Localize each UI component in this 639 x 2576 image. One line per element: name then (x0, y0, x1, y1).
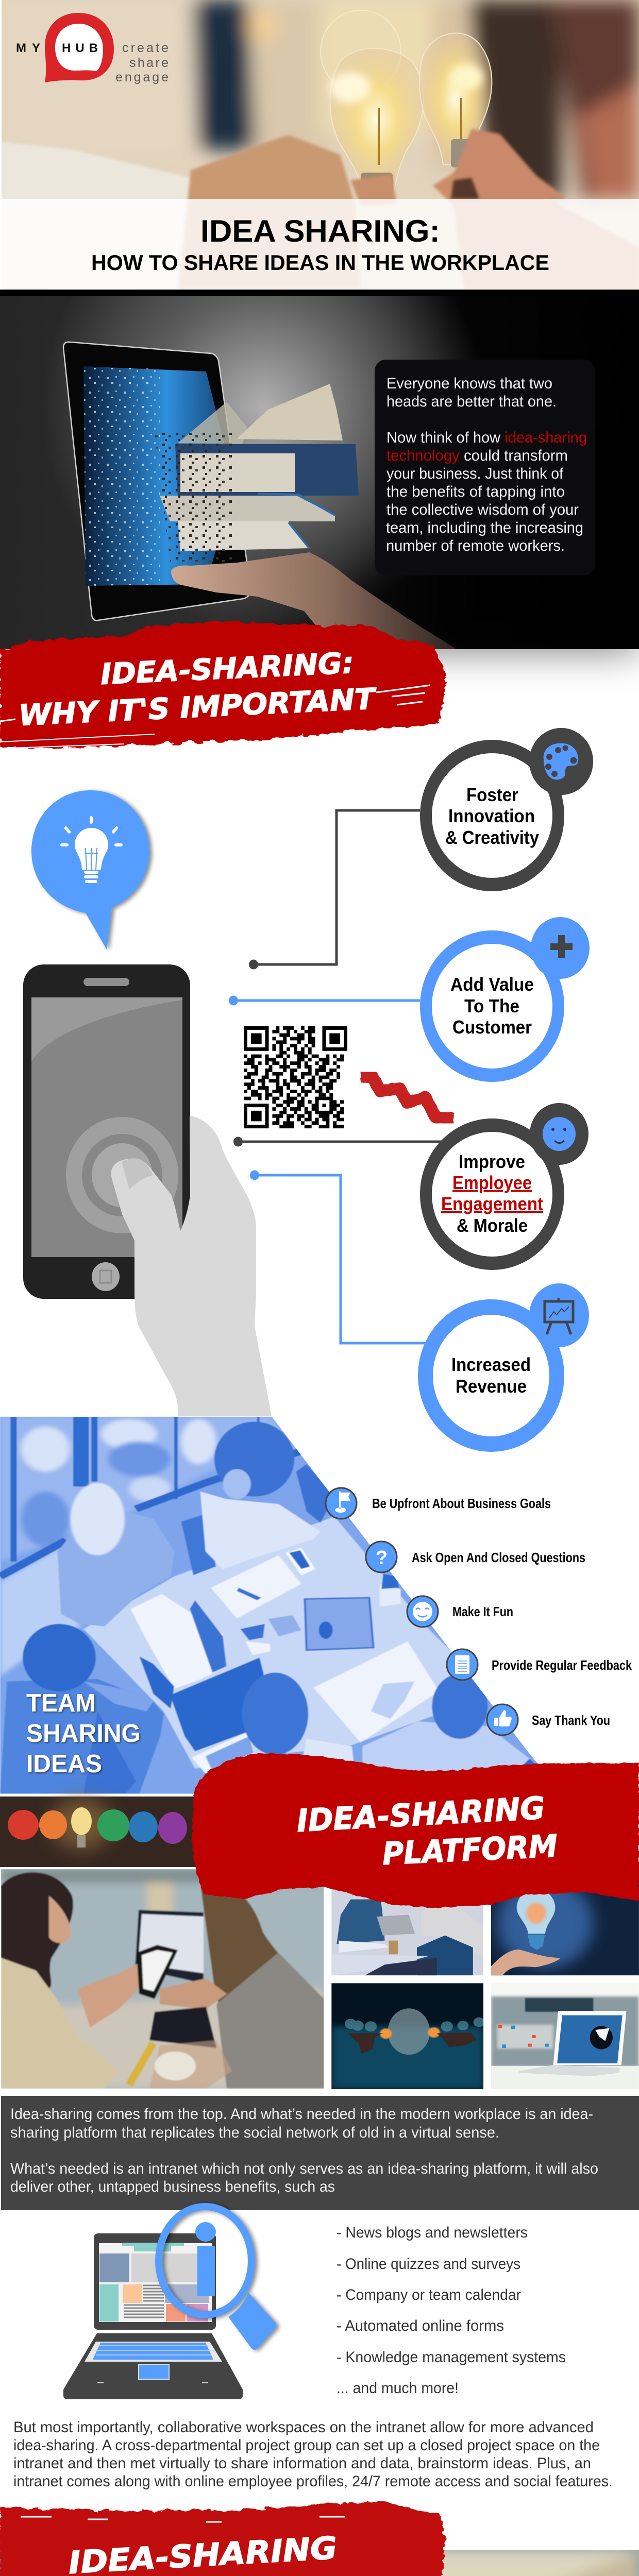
icon: thumbs up (494, 1710, 512, 1726)
image: laptop with floating app icons (491, 1982, 639, 2089)
step: say thank you (487, 1704, 610, 1735)
icon: plus (550, 935, 573, 958)
connector dot: blue (229, 995, 238, 1006)
list: intranet benefits: ... and much more! (337, 2380, 459, 2397)
icon: happy face (413, 1602, 432, 1621)
qr code (244, 1026, 347, 1128)
icon: hand tapping phone (111, 1116, 272, 1416)
step: say thank you: Say Thank You (532, 1713, 610, 1728)
connector dot: blue lower (250, 1171, 259, 1180)
panel: intro text box: the benefits of tapping into (386, 483, 565, 500)
panel: intro text box: heads are better that one. (386, 393, 557, 410)
list: intranet benefits: - Company or team calendar (337, 2286, 521, 2303)
connector dot: gray lower (233, 1137, 243, 1147)
icon: question mark: ? (376, 1547, 388, 1569)
logo: MyHub with tagline: share (129, 56, 169, 70)
callout: Add Value To The Customer: Add Value (450, 974, 534, 995)
callout: Improve Employee Engagement & Morale: Engagement (441, 1193, 543, 1214)
list: intranet benefits: - Online quizzes and surveys (337, 2256, 520, 2273)
title: HOW TO SHARE IDEAS IN THE WORKPLACE (91, 250, 549, 275)
heading banner: why it's important: WHY IT'S IMPORTANT (18, 682, 378, 733)
list: intranet benefits (337, 2224, 566, 2397)
panel: intro text box: team, including the increasing (386, 519, 583, 536)
step: make it fun (407, 1596, 513, 1627)
logo: MyHub with tagline: MY (16, 41, 40, 55)
text block: collaborative workspaces paragraph (13, 2419, 613, 2490)
title band overlay (0, 199, 639, 290)
panel: intro text box (375, 360, 595, 575)
callout: Increased Revenue (418, 1283, 589, 1452)
connector: gray line to Foster Innovation (254, 810, 420, 964)
callout: Foster Innovation & Creativity: & Creativity (445, 827, 539, 848)
title: IDEA SHARING: (200, 214, 440, 248)
panel: intro text box: number of remote workers. (386, 537, 565, 554)
callout: Foster Innovation & Creativity (420, 728, 593, 891)
panel: dark text block on idea-sharing platform: sharing platform that replicates the social network of old in a virtual sense. (10, 2124, 499, 2141)
heading banner: idea-sharing platform (192, 1753, 639, 1908)
callout: Improve Employee Engagement & Morale (420, 1103, 588, 1270)
panel: dark text block on idea-sharing platform: What’s needed is an intranet which not only serves as an idea-sharing platform, it will also (10, 2160, 598, 2177)
icon: smartphone (23, 964, 190, 1299)
logo: MyHub with tagline: engage (115, 70, 169, 84)
text block: collaborative workspaces paragraph: But most importantly, collaborative workspaces on the intranet allow for more advanced (13, 2419, 594, 2436)
icon: presentation easel (545, 1298, 573, 1334)
panel: header photo of hands holding light bulbs (0, 0, 639, 290)
connector: gray line to Improve Engagement (238, 1141, 442, 1143)
panel: dark tablet and books image (0, 290, 639, 649)
icon: flag (335, 1492, 350, 1513)
callout: Increased Revenue: Revenue (456, 1376, 527, 1397)
logo: MyHub with tagline: create (122, 41, 169, 55)
callout: Add Value To The Customer: Customer (452, 1016, 532, 1038)
panel: intro text box: technology could transform (386, 447, 568, 464)
text block: collaborative workspaces paragraph: idea-sharing. A cross-departmental project group can set up a closed project space on the (13, 2437, 600, 2454)
list: intranet benefits: - Automated online forms (337, 2317, 504, 2334)
list: intranet benefits: - Knowledge management systems (337, 2349, 566, 2366)
panel: dark text block on idea-sharing platform: Idea-sharing comes from the top. And what’s needed in the modern workplace is an idea- (10, 2106, 593, 2123)
step: provide regular feedback (447, 1649, 632, 1680)
callout: Add Value To The Customer (420, 917, 590, 1082)
panel: smartphone in hand photo (0, 2550, 639, 2576)
panel: dark text block on idea-sharing platform: deliver other, untapped business benefits, such as (10, 2178, 335, 2195)
step: ask open and closed questions (366, 1541, 585, 1572)
callout: Foster Innovation & Creativity: Foster (466, 784, 518, 805)
icon: notepad (455, 1655, 469, 1674)
list: intranet benefits: - News blogs and newsletters (337, 2224, 528, 2241)
icon: smiley (543, 1117, 576, 1151)
step: be upfront about business goals (326, 1488, 551, 1519)
text: team sharing ideas (26, 1689, 141, 1778)
image: crumpled paper balls and bulb strip (0, 1797, 206, 1867)
icon: light bulb speech bubble (31, 790, 149, 950)
callout: Foster Innovation & Creativity: Innovation (448, 805, 535, 826)
logo: MyHub with tagline (16, 13, 169, 84)
text: team sharing ideas: IDEAS (26, 1750, 102, 1778)
icon: laptop with magnifying glass (63, 2207, 277, 2399)
callout: Improve Employee Engagement & Morale: Improve (459, 1151, 525, 1172)
connector: blue line to Increased Revenue (255, 1175, 426, 1343)
image: team with analytics overlay (331, 1889, 483, 1975)
heading banner: idea-sharing platform: PLATFORM (382, 1828, 558, 1872)
callout: Improve Employee Engagement & Morale: & Morale (457, 1215, 528, 1236)
step: be upfront about business goals: Be Upfront About Business Goals (372, 1496, 551, 1511)
red brush squiggle (361, 1076, 453, 1119)
callout: Improve Employee Engagement & Morale: Employee (452, 1172, 532, 1193)
panel: intro text box: Now think of how idea-sharing (386, 429, 587, 446)
text block: collaborative workspaces paragraph: intranet comes along with online employee profiles, 24/7 remote access and social features. (13, 2473, 613, 2490)
title (91, 214, 549, 275)
panel: intro text box: Everyone knows that two (386, 375, 552, 392)
heading banner: why it's important (0, 621, 446, 748)
panel: team sharing ideas duotone photo (0, 1412, 546, 1803)
icon: books (155, 384, 359, 562)
connector: blue line to Add Value (233, 999, 420, 1002)
text: team sharing ideas: TEAM (26, 1689, 96, 1717)
panel: intro text box: the collective wisdom of your (386, 501, 579, 518)
text: team sharing ideas: SHARING (26, 1720, 141, 1748)
panel: intro text box: your business. Just think of (386, 465, 564, 482)
magnifying glass (159, 2207, 277, 2350)
image: digital globe between fingers (331, 1983, 484, 2089)
panel: dark text block on idea-sharing platform (1, 2096, 639, 2210)
icon: palette (544, 743, 578, 779)
step: ask open and closed questions: Ask Open And Closed Questions (412, 1550, 585, 1565)
logo: MyHub with tagline: HUB (62, 41, 98, 55)
icon: tablet (63, 342, 250, 620)
image: glowing bulb over hand (491, 1870, 639, 1975)
heading banner: idea-sharing platform: IDEA-SHARING (296, 1790, 546, 1839)
connector dot: gray (249, 959, 258, 970)
text block: collaborative workspaces paragraph: intranet and then met virtually to share information and data, brainstorm ideas. Plus, an (13, 2455, 591, 2472)
heading banner: idea-sharing with an intranet (0, 2501, 445, 2576)
heading banner: why it's important: IDEA-SHARING: (100, 647, 355, 691)
image: two women with tablet (1, 1869, 324, 2089)
icon: hand holding books (171, 552, 457, 649)
step: make it fun: Make It Fun (452, 1604, 513, 1619)
callout: Add Value To The Customer: To The (464, 995, 519, 1016)
callout: Increased Revenue: Increased (451, 1354, 531, 1375)
